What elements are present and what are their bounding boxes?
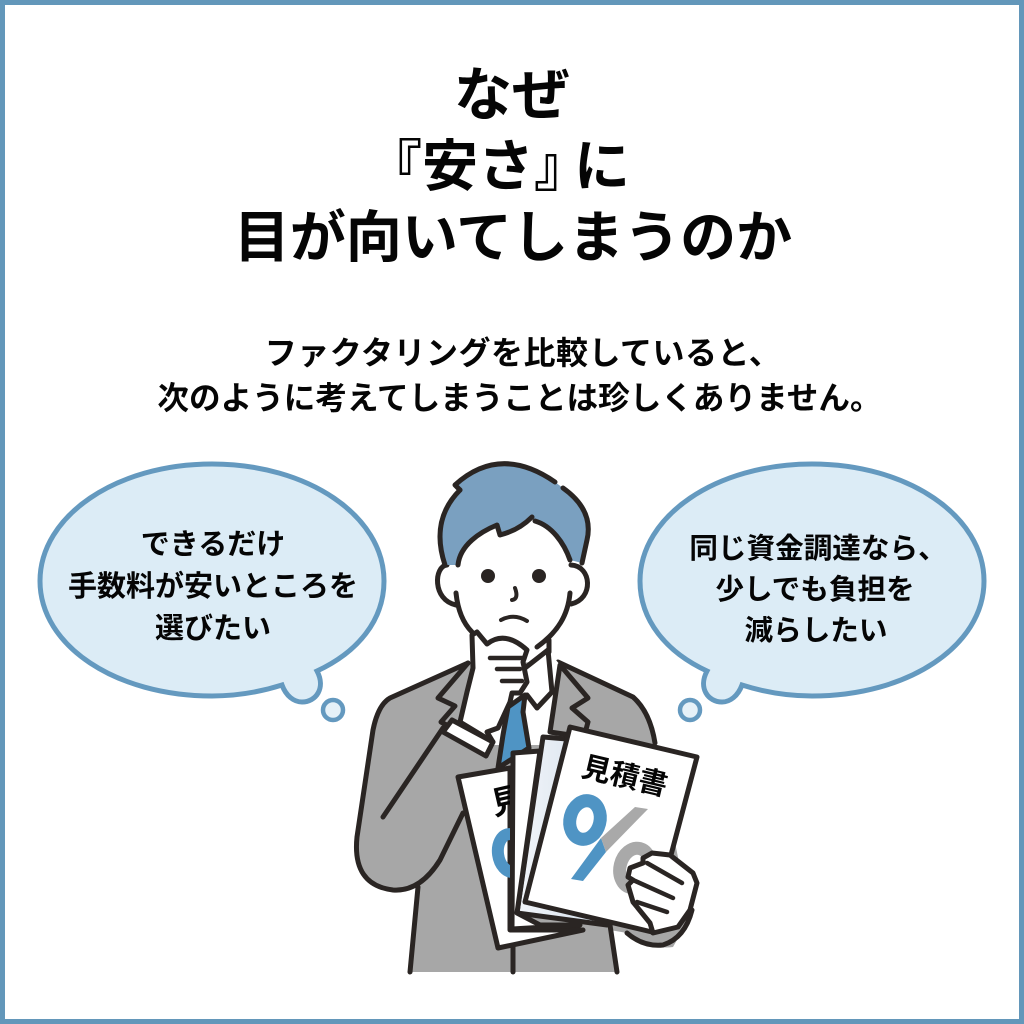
shirt xyxy=(487,650,560,745)
front paper xyxy=(525,727,697,932)
ears and jaw xyxy=(437,565,456,605)
thought bubble: left: 手数料が安いところを xyxy=(68,569,358,603)
thought bubble: right: 少しでも負担を xyxy=(715,574,915,606)
thought bubble: right: 減らしたい xyxy=(745,615,887,647)
intro text: 次のように考えてしまうことは珍しくありません。 xyxy=(157,380,882,416)
thought bubble: left: できるだけ xyxy=(141,529,285,561)
back paper label xyxy=(492,784,510,878)
hair xyxy=(439,464,588,565)
title: なぜ xyxy=(454,63,570,128)
back paper label: 見 xyxy=(488,780,527,822)
mouth xyxy=(501,617,527,621)
shirt cuff xyxy=(443,720,493,756)
title xyxy=(234,63,792,269)
quote papers xyxy=(458,768,583,948)
raised hand xyxy=(460,632,527,742)
nose xyxy=(512,588,516,600)
businessman illustration xyxy=(356,464,697,972)
intro text: ファクタリングを比較していると、 xyxy=(265,335,781,371)
lapels xyxy=(438,663,468,728)
right hand xyxy=(628,853,697,933)
front paper label: 見積書 xyxy=(579,750,671,803)
thought bubble: right: 同じ資金調達なら、 xyxy=(689,533,947,565)
eyes xyxy=(481,569,495,583)
title: 目が向いてしまうのか xyxy=(234,206,792,269)
sleeve under right hand xyxy=(627,910,692,945)
thought bubble: left: 選びたい xyxy=(155,612,271,645)
title: 『安さ』に xyxy=(366,135,630,198)
tie xyxy=(498,695,529,768)
thought bubble: right xyxy=(640,464,984,720)
percent sign xyxy=(566,797,654,891)
thought bubble: left xyxy=(40,464,384,720)
intro text xyxy=(157,335,882,416)
head xyxy=(437,510,589,650)
suit body xyxy=(357,662,690,972)
